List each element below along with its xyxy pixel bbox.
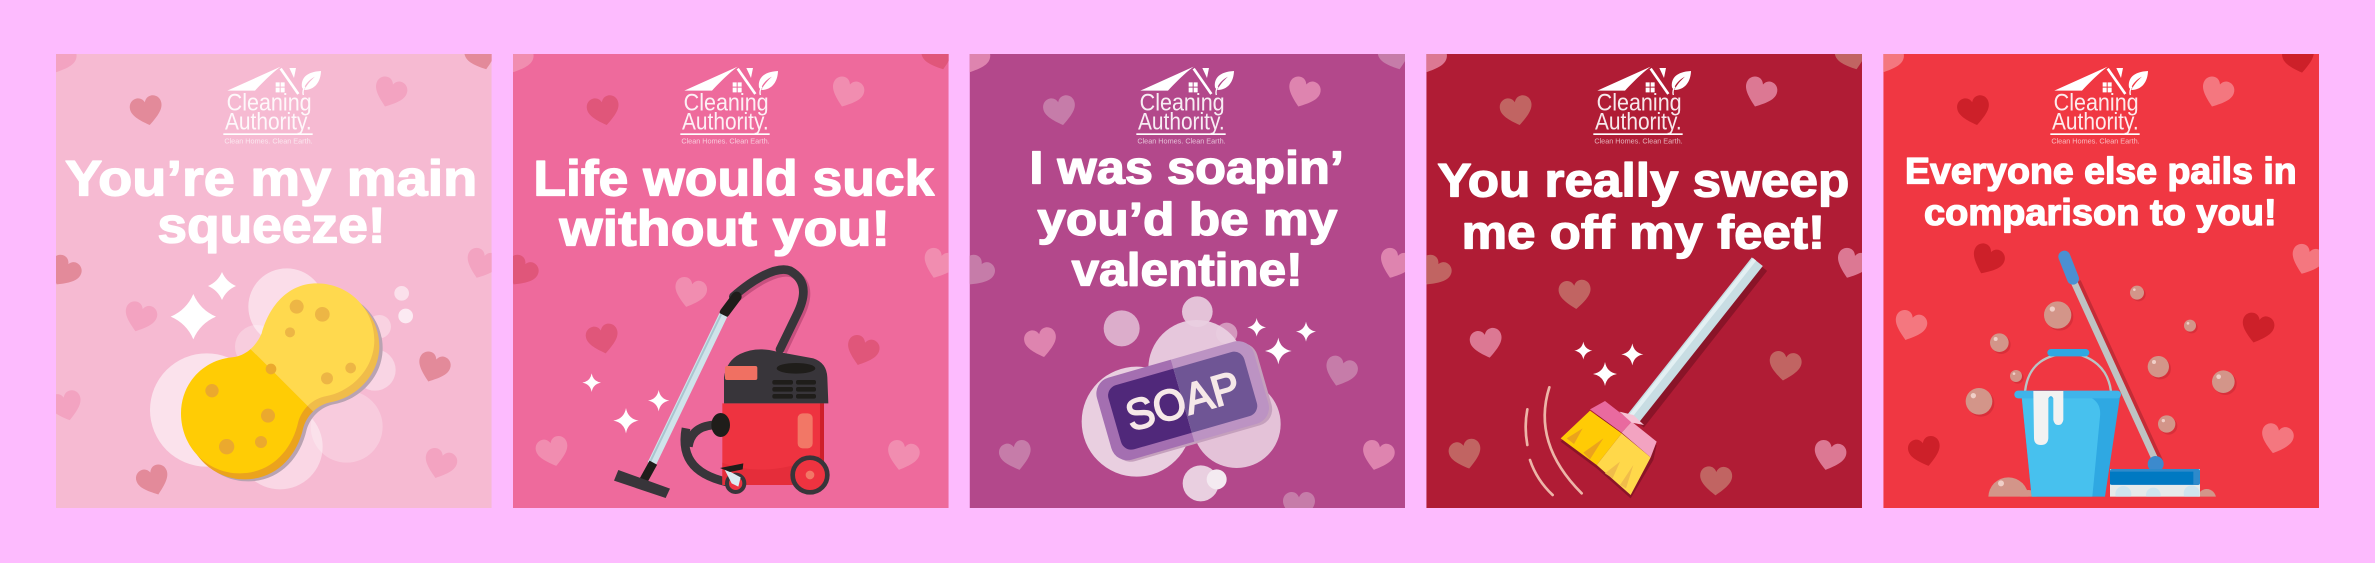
panel: soap card [970, 54, 1405, 508]
background hearts [1410, 37, 1872, 496]
heading: I was soapin’ [1029, 141, 1344, 193]
sparkles [1247, 318, 1316, 364]
soap label: SOAP [1120, 363, 1246, 441]
logo [223, 67, 321, 146]
panel: bucket and mop card [1867, 40, 2326, 517]
logo: Cleaning [684, 90, 769, 117]
logo: Authority. [1595, 108, 1682, 135]
icon: bucket [2014, 353, 2121, 497]
icon: mop [2064, 257, 2200, 502]
background hearts [497, 37, 958, 474]
icon: broom [1561, 259, 1763, 498]
panel: main squeeze card [40, 37, 501, 508]
logo: Cleaning [1597, 90, 1682, 117]
panel: vacuum card [497, 37, 958, 508]
heading: squeeze! [157, 198, 386, 254]
logo: Authority. [1138, 108, 1225, 135]
heading [65, 151, 477, 254]
logo: Cleaning [2054, 90, 2139, 117]
heading: valentine! [1072, 244, 1303, 296]
heading: comparison to you! [1924, 192, 2277, 233]
logo: Clean Homes. Clean Earth. [681, 139, 770, 146]
logo [680, 67, 778, 146]
background hearts [953, 37, 1415, 521]
bubbles [1966, 286, 2237, 517]
logo [2050, 67, 2148, 146]
background hearts [40, 37, 501, 500]
sparkles [1574, 342, 1643, 386]
heading: you’d be my [1037, 193, 1337, 245]
icon: vacuum cleaner [614, 270, 828, 498]
logo: Cleaning [1140, 90, 1225, 117]
heading: You really sweep [1437, 155, 1849, 208]
sparkles [171, 272, 236, 339]
heading: Everyone else pails in [1905, 150, 2297, 191]
logo: Authority. [682, 108, 769, 135]
soap suds [1082, 296, 1281, 501]
logo: Clean Homes. Clean Earth. [2051, 139, 2140, 146]
logo: Authority. [225, 108, 312, 135]
heading [1437, 155, 1849, 259]
logo [1593, 67, 1691, 146]
logo: Clean Homes. Clean Earth. [1137, 139, 1226, 146]
logo: Clean Homes. Clean Earth. [224, 139, 313, 146]
heading: Life would suck [533, 150, 935, 206]
sparkles [582, 373, 669, 433]
logo: Authority. [2052, 108, 2139, 135]
icon: soap bar [1096, 341, 1272, 462]
soap suds [150, 268, 413, 489]
heading: You’re my main [65, 151, 477, 207]
heading: without you! [558, 201, 890, 257]
heading [533, 150, 935, 257]
heading [1032, 149, 1342, 287]
logo: Cleaning [227, 90, 312, 117]
logo: Clean Homes. Clean Earth. [1594, 139, 1683, 146]
background hearts [1867, 40, 2326, 470]
icon: sponge [181, 283, 383, 481]
logo [1136, 67, 1234, 146]
motion lines [1526, 387, 1582, 495]
heading [1905, 150, 2297, 233]
panel: broom card [1410, 37, 1872, 508]
heading: me off my feet! [1462, 206, 1825, 259]
